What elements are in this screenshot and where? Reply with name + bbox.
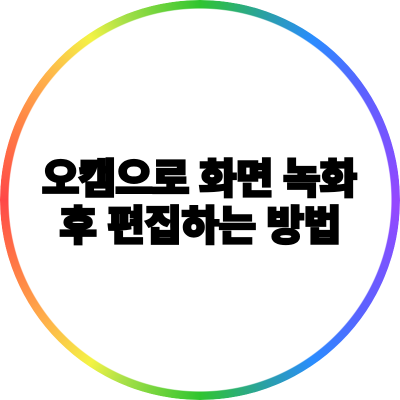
title [42, 156, 358, 249]
title line 2: 후 편집하는 방법 [59, 203, 341, 249]
title line 1: 오캠으로 화면 녹화 [42, 156, 356, 202]
